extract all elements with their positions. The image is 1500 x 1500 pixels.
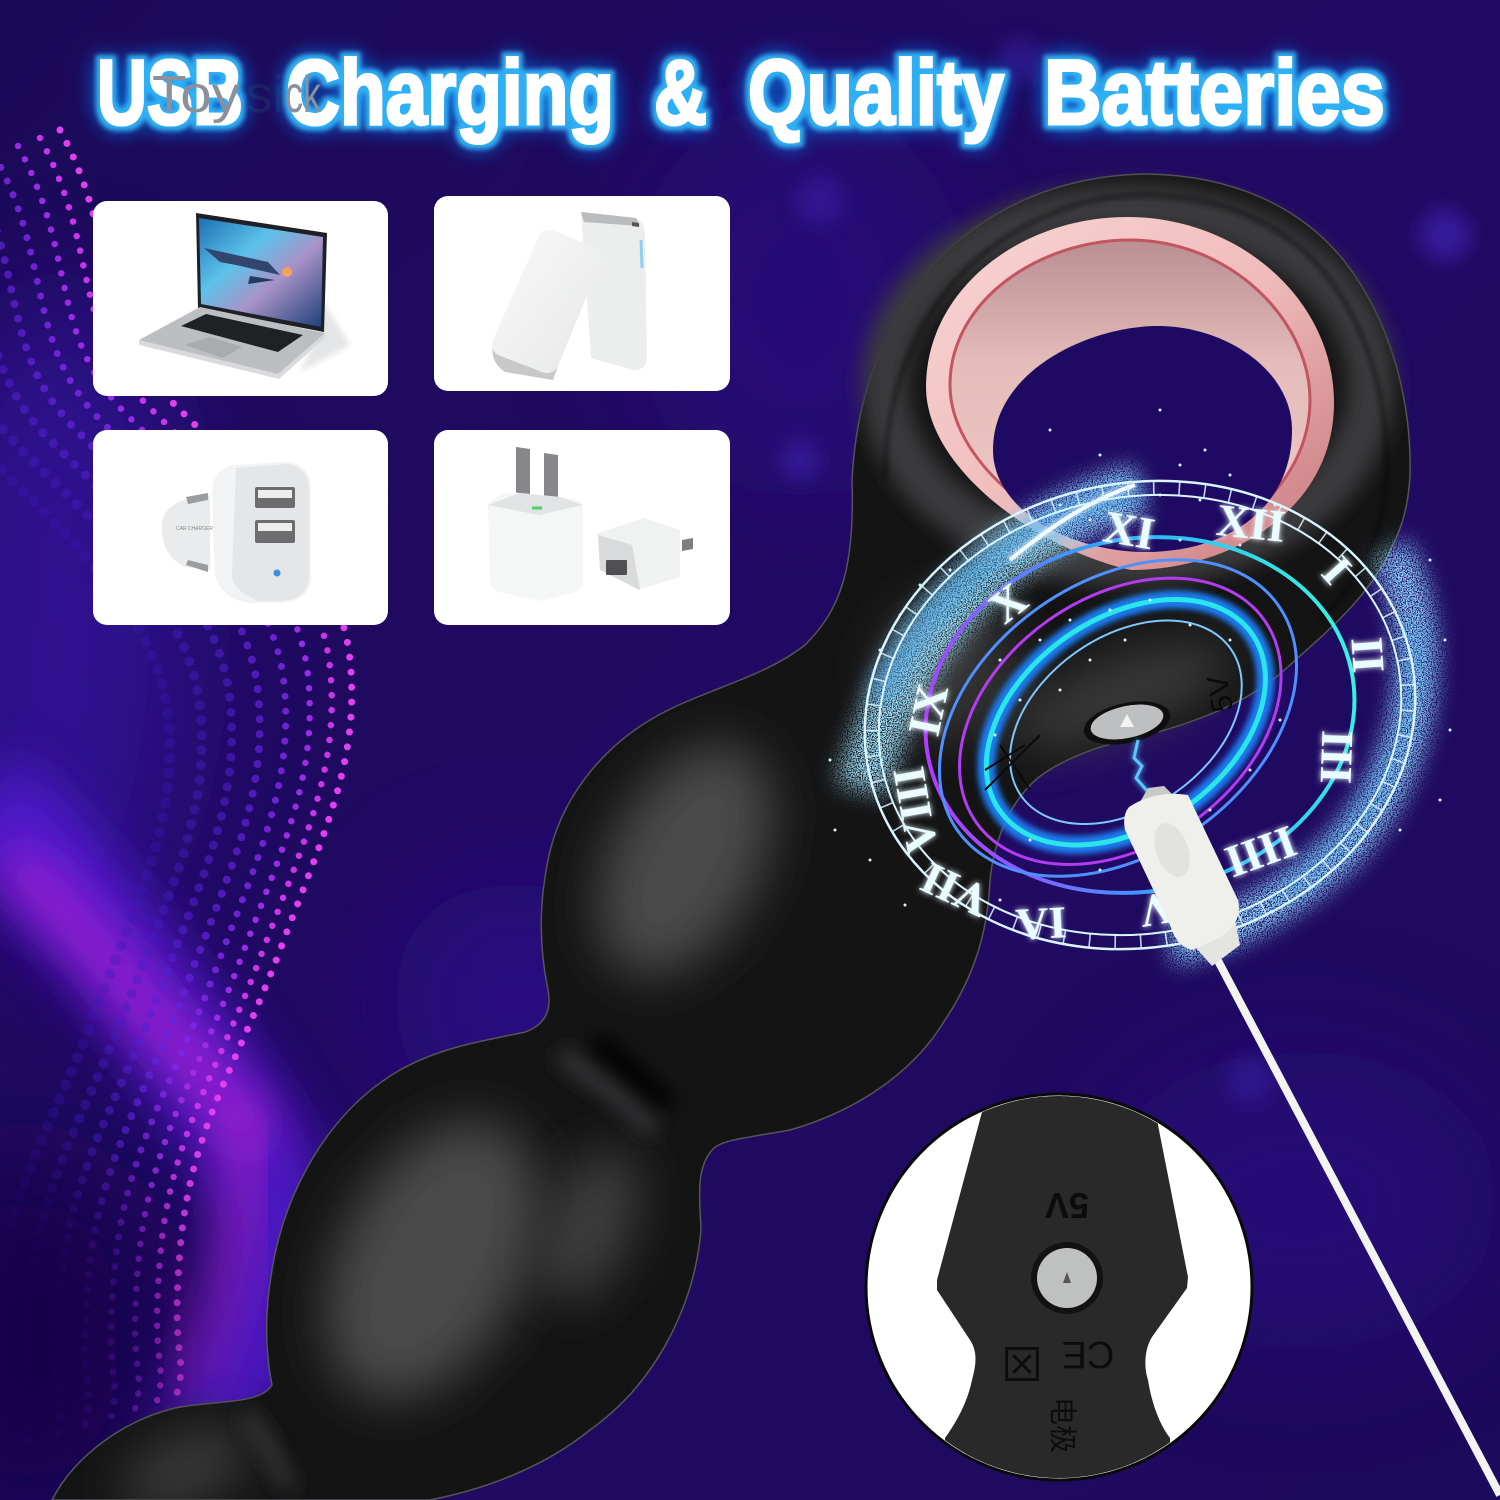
- title: &: [654, 42, 707, 144]
- inset product close-up: [937, 1090, 1188, 1490]
- roman numerals: IIII: [1219, 816, 1303, 888]
- icon: power banks: [492, 212, 647, 380]
- embossed certification mark: [985, 735, 1040, 790]
- roman numerals: VI: [1014, 896, 1068, 950]
- roman numerals: III: [1311, 729, 1363, 785]
- roman numerals: XII: [1214, 494, 1288, 552]
- pink ring opening: [926, 217, 1334, 570]
- title: USB: [97, 42, 243, 144]
- watermark: si: [246, 66, 284, 124]
- glittering dust clouds: [862, 485, 1416, 945]
- dotted wave mesh: [0, 130, 352, 1456]
- bead highlights: [107, 600, 1246, 1500]
- colored orbit rings: [879, 494, 1357, 942]
- clock dial: [821, 430, 1459, 1000]
- title: Charging: [286, 42, 614, 144]
- inset product close-up: CE: [1062, 1333, 1114, 1375]
- ring band: [885, 207, 1371, 563]
- inset product close-up: ⊠: [1001, 1339, 1043, 1386]
- roman numerals: X: [979, 573, 1037, 633]
- icon: wall adapter: [488, 447, 693, 600]
- card: laptop: [93, 201, 388, 396]
- dark lower-left vignette: [0, 1150, 160, 1500]
- inset circle: [866, 1090, 1252, 1490]
- embossed 5V mark: 5V: [1201, 673, 1240, 715]
- card: wall adapters: [434, 430, 730, 625]
- roman numerals: VII: [913, 852, 997, 928]
- roman numerals: XI: [1099, 500, 1159, 560]
- purple light band: [0, 800, 276, 1440]
- outer orbit ring: [892, 498, 1388, 932]
- roman numerals: I: [1312, 546, 1362, 594]
- card: power banks: [434, 196, 730, 391]
- title: Quality: [748, 42, 1004, 144]
- charge port: [1080, 694, 1174, 752]
- title: Batteries: [1044, 42, 1385, 144]
- card: car charger: [93, 430, 388, 625]
- glitter stars: [830, 410, 1450, 905]
- electric spark: [1134, 740, 1148, 792]
- watermark: ck: [285, 66, 322, 124]
- watermark: [152, 66, 322, 124]
- roman numerals: II: [1341, 635, 1395, 675]
- inset product close-up: 电极: [1047, 1397, 1078, 1453]
- icon: laptop: [139, 213, 350, 379]
- roman numerals: V: [1135, 882, 1177, 938]
- watermark: Toy: [152, 66, 240, 124]
- roman numerals: IX: [898, 680, 958, 740]
- charging cable: [1124, 786, 1500, 1495]
- roman numerals: VIII: [882, 763, 948, 857]
- ring hole: [993, 326, 1292, 552]
- icon: car charger: CAR CHARGER: [176, 526, 213, 532]
- icon: car charger: [162, 462, 311, 603]
- roman numerals: [882, 494, 1395, 950]
- title: [97, 42, 1385, 144]
- inset product close-up: 5V: [1045, 1185, 1089, 1226]
